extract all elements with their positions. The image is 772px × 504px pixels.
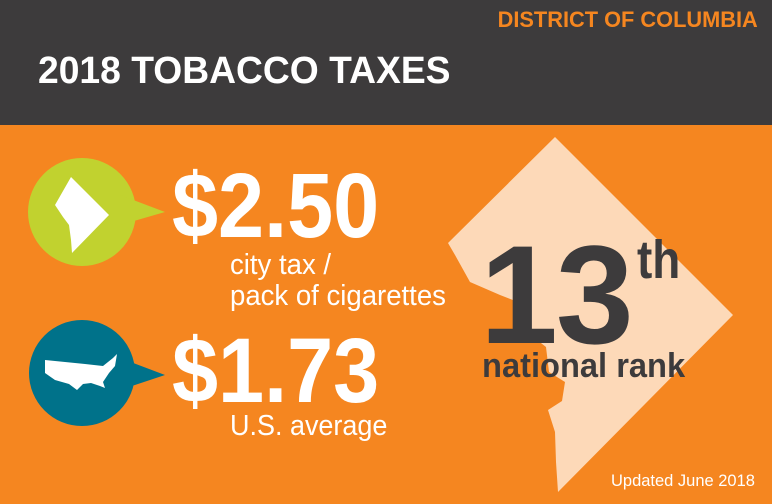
stat: city tax <box>172 155 446 312</box>
stat: city tax: pack of cigarettes <box>230 280 446 312</box>
stat: city tax: $2.50 <box>172 155 379 257</box>
title: 2018 TOBACCO TAXES <box>38 50 451 92</box>
header bar <box>0 0 772 125</box>
national rank: th <box>637 230 680 290</box>
icon: blue circle with USA <box>29 320 165 426</box>
stat: city tax: city tax / <box>230 249 331 281</box>
national rank: 13 <box>480 216 632 373</box>
stat: US average: U.S. average <box>230 410 387 442</box>
national rank <box>480 216 686 385</box>
stat: US average: $1.73 <box>172 320 379 422</box>
national rank: national rank <box>482 347 685 385</box>
subtitle: district of columbia: DISTRICT OF COLUMBIA <box>498 7 758 32</box>
icon: green circle with DC <box>28 158 165 266</box>
footer note: Updated June 2018 <box>611 471 755 490</box>
